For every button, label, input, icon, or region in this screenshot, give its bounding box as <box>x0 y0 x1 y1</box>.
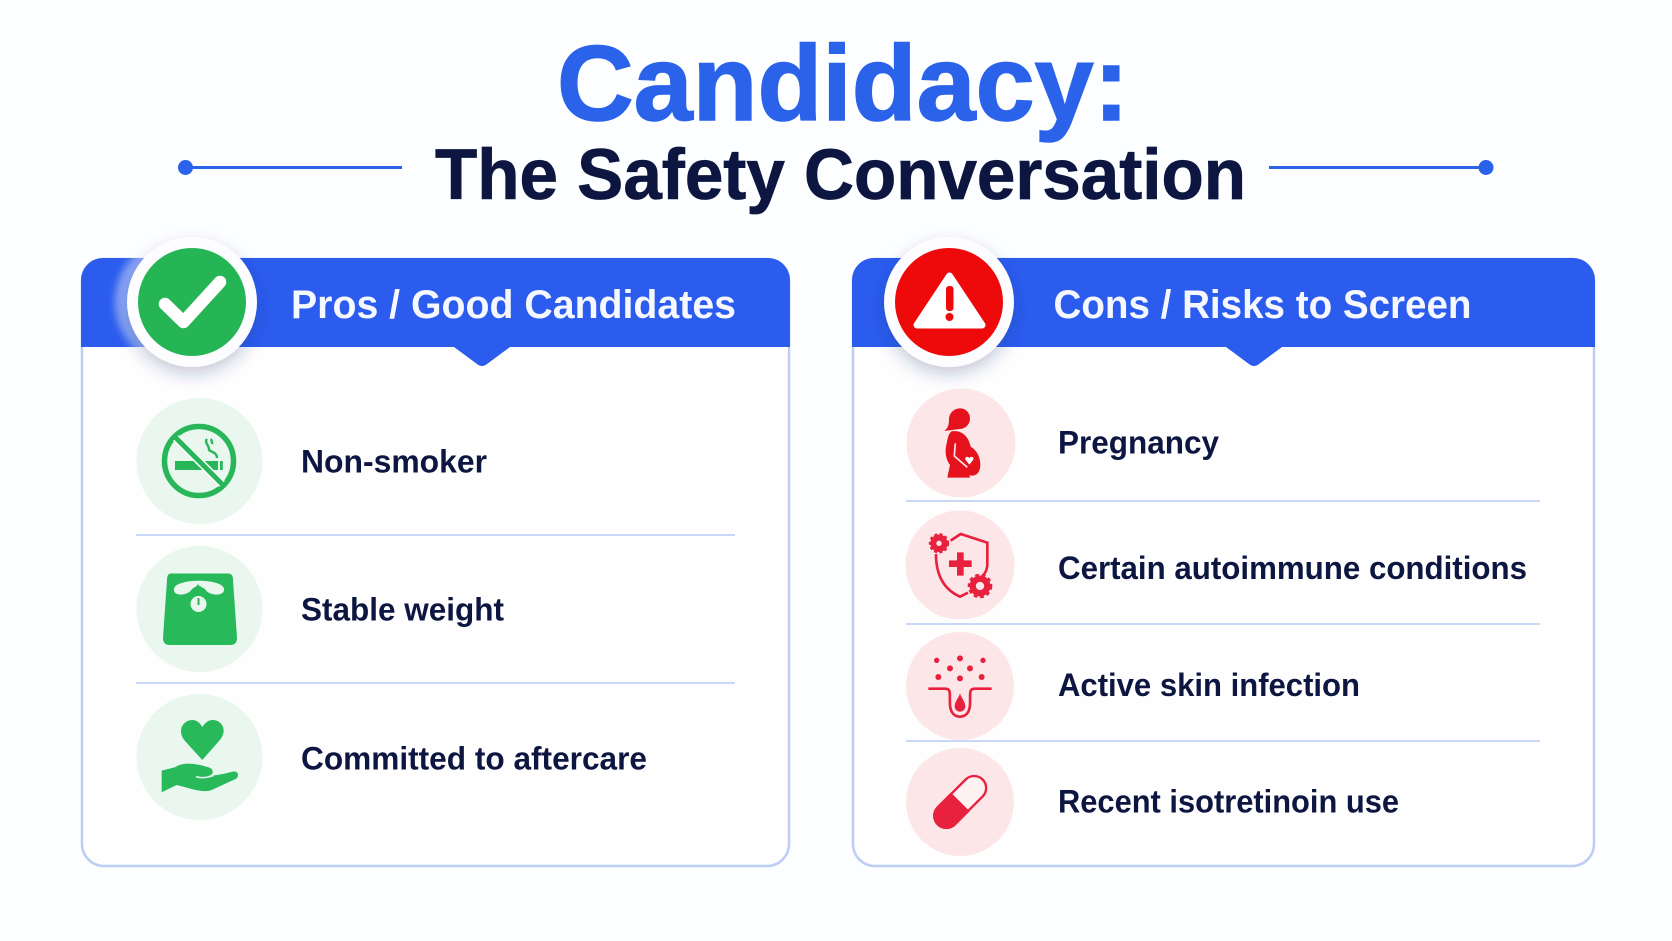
badge: red warning <box>884 237 1014 367</box>
icon: scale <box>136 546 262 672</box>
row: aftercare <box>136 694 647 820</box>
title <box>435 23 1246 215</box>
panel body <box>82 259 789 866</box>
label: Recent isotretinoin use <box>1058 784 1399 820</box>
row: stable weight <box>136 546 504 672</box>
icon: pregnant woman <box>906 388 1016 498</box>
icon: capsule <box>906 748 1014 856</box>
panel: pros <box>81 237 790 866</box>
panel body <box>853 259 1594 866</box>
left title ornament <box>178 160 402 175</box>
label: Non-smoker <box>301 444 487 480</box>
row: isotretinoin <box>906 748 1399 856</box>
panel: cons <box>852 237 1595 866</box>
label: Pregnancy <box>1058 424 1219 460</box>
panel header band <box>81 258 790 366</box>
row: autoimmune <box>906 510 1527 620</box>
right title ornament <box>1269 160 1494 175</box>
label: Stable weight <box>301 592 504 628</box>
icon: shield with gears <box>906 510 1014 620</box>
label: Committed to aftercare <box>301 740 647 776</box>
row: pregnancy <box>906 388 1219 498</box>
panel heading: Pros / Good Candidates <box>291 283 736 327</box>
icon: skin follicle <box>906 632 1014 740</box>
row: skin infection <box>906 632 1360 740</box>
title line 2: The Safety Conversation: The Safety Conversation <box>435 136 1246 215</box>
panel heading: Cons / Risks to Screen <box>1054 283 1472 327</box>
badge: green check <box>127 237 257 367</box>
panel header band <box>852 258 1595 366</box>
icon: no smoking <box>136 398 262 524</box>
label: Certain autoimmune conditions <box>1058 550 1527 586</box>
row: non-smoker <box>136 398 487 524</box>
title line 1: Candidacy: Candidacy: <box>557 23 1129 143</box>
icon: heart in hand <box>136 694 262 820</box>
label: Active skin infection <box>1058 667 1360 703</box>
header glow <box>115 237 245 367</box>
